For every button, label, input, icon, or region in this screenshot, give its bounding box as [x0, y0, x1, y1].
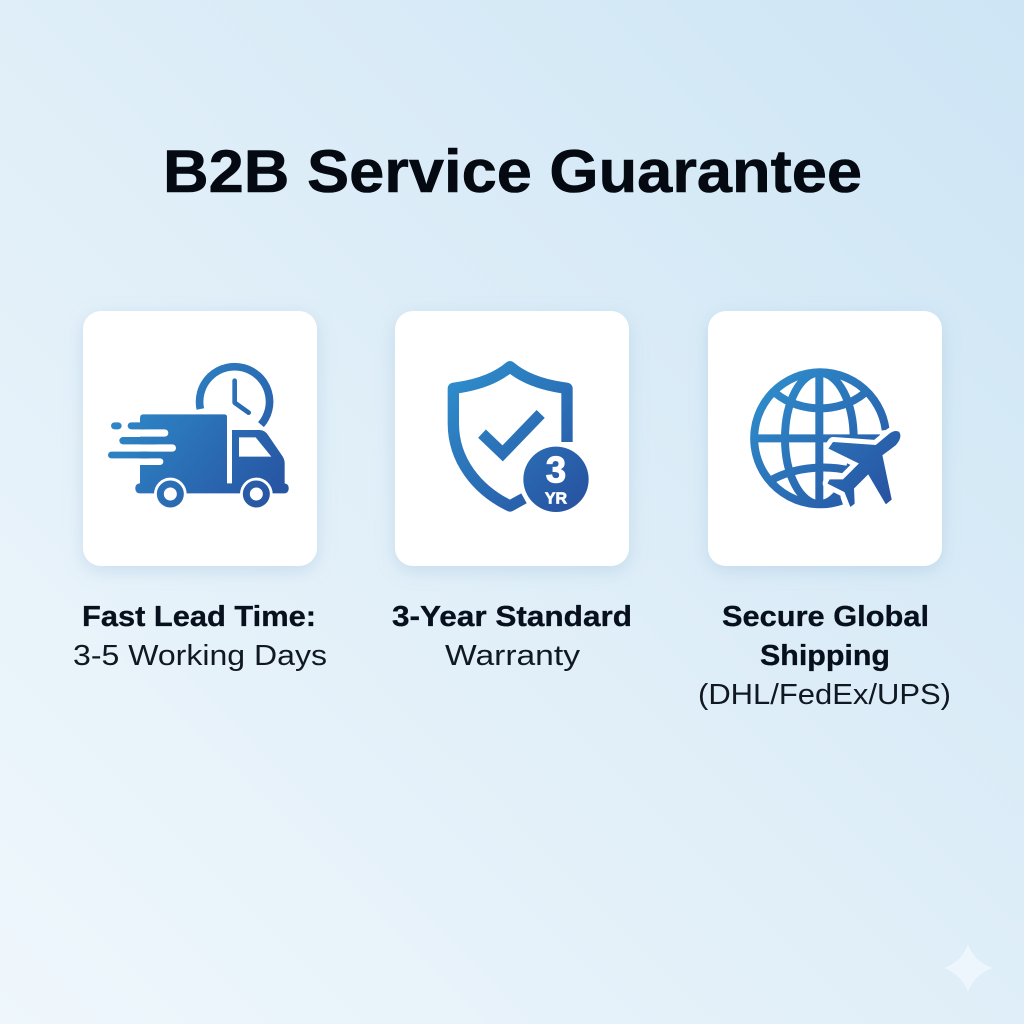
icon: sparkle watermark [944, 944, 993, 992]
airplane [828, 432, 900, 506]
panel: fast lead time [83, 311, 317, 566]
card: globe [708, 311, 942, 566]
icon: globe with airplane [754, 372, 900, 506]
clock [200, 367, 270, 425]
label: fast lead time: Fast Lead Time: [82, 601, 316, 633]
3 YR badge [523, 447, 589, 512]
wheels [154, 478, 187, 510]
label: global shipping: (DHL/FedEx/UPS) [698, 679, 951, 711]
label: global shipping: Secure Global [722, 601, 929, 633]
label: fast lead time: 3-5 Working Days [73, 640, 327, 672]
icon: delivery truck with clock [108, 367, 289, 510]
label: global shipping [698, 601, 951, 711]
panel: warranty [395, 311, 629, 566]
label: warranty: Warranty [445, 640, 581, 672]
3 YR badge: YR [545, 490, 568, 507]
icon: shield with check and 3 YR badge [453, 367, 589, 512]
label: warranty [392, 601, 632, 672]
truck cab [232, 430, 285, 484]
label: global shipping: Shipping [760, 640, 890, 672]
title: B2B Service Guarantee [163, 138, 862, 205]
label: fast lead time [73, 601, 327, 672]
label: warranty: 3-Year Standard [392, 601, 632, 633]
card: shield [395, 311, 629, 566]
globe [754, 372, 886, 504]
check mark [482, 414, 541, 453]
shield outline [453, 367, 567, 506]
panel: global shipping [708, 311, 942, 566]
airplane halo [828, 432, 900, 506]
truck body [140, 414, 227, 484]
3 YR badge: 3 [546, 450, 566, 491]
card: truck [83, 311, 317, 566]
